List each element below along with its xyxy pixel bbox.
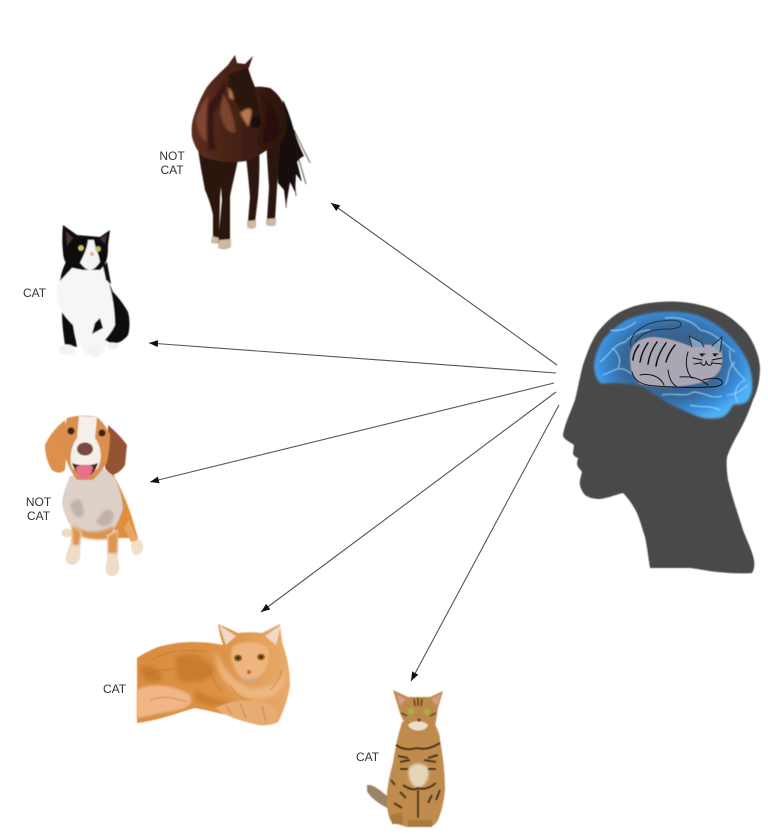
picture: beagle dog bbox=[45, 416, 143, 576]
cat ears bbox=[689, 336, 722, 352]
picture: horse bbox=[192, 55, 310, 249]
orange cat eyes and nose bbox=[234, 655, 242, 661]
tabby inner ears bbox=[396, 694, 441, 706]
label: not cat (dog): CAT bbox=[27, 509, 51, 523]
cat tail bbox=[631, 320, 681, 347]
tabby muzzle bbox=[408, 721, 428, 731]
cat black head bbox=[62, 225, 110, 270]
horse head bbox=[228, 68, 261, 128]
label: not cat (dog): NOT bbox=[26, 495, 51, 509]
horse tail hairs bbox=[286, 130, 310, 208]
tabby feet bbox=[390, 812, 432, 827]
cat eyes and nose bbox=[78, 245, 84, 251]
horse front legs bbox=[198, 148, 240, 243]
orange cat face bbox=[231, 642, 269, 682]
arrow: to black and white cat bbox=[149, 343, 556, 373]
tabby stripes bbox=[391, 743, 440, 818]
dog face bbox=[63, 416, 110, 480]
arrow: to tabby cat bbox=[411, 405, 559, 681]
dog left ear bbox=[45, 420, 67, 473]
tabby forehead stripes bbox=[401, 698, 436, 716]
label: cat (tabby): CAT bbox=[356, 750, 380, 764]
orange cat inner ears bbox=[219, 625, 281, 645]
cat black front leg bbox=[62, 312, 77, 347]
dog belly orange bbox=[72, 524, 114, 540]
arrow: to horse bbox=[331, 203, 557, 365]
horse forehead and muzzle markings bbox=[228, 87, 252, 127]
picture: orange long-haired cat bbox=[137, 624, 290, 725]
label: cat (black and white): CAT bbox=[23, 286, 47, 300]
orange cat paws bbox=[215, 700, 278, 725]
illustration: head with brain and cat bbox=[563, 302, 760, 573]
horse hooves bbox=[211, 218, 276, 249]
head silhouette bbox=[563, 302, 760, 573]
orange cat tail bbox=[137, 685, 191, 718]
cat black shoulders bbox=[60, 262, 111, 284]
picture: tabby cat bbox=[367, 690, 445, 827]
cat black chest mark bbox=[92, 318, 103, 334]
dog white blaze and muzzle bbox=[71, 416, 101, 473]
label: not cat (horse): CAT bbox=[160, 163, 184, 177]
dog legs bbox=[66, 522, 119, 576]
orange cat fur shading bbox=[140, 654, 230, 706]
brain bbox=[594, 312, 752, 419]
dog chest shading bbox=[70, 499, 114, 526]
arrow: to orange cat bbox=[261, 392, 556, 612]
arrow: to dog bbox=[150, 383, 554, 482]
orange cat fur strands bbox=[145, 650, 282, 702]
dog tongue bbox=[76, 465, 93, 479]
orange cat fur light areas bbox=[215, 650, 286, 699]
horse muzzle shadow bbox=[251, 116, 261, 128]
cat face bbox=[693, 354, 722, 365]
horse back legs bbox=[245, 138, 281, 222]
label: not cat (horse): NOT bbox=[159, 149, 185, 163]
cat outline and stripes bbox=[632, 372, 722, 387]
tabby body bbox=[387, 722, 445, 827]
cartoon cat in brain bbox=[630, 320, 723, 387]
dog eyes bbox=[67, 427, 75, 435]
tabby tail bbox=[367, 785, 392, 810]
label: cat (orange): CAT bbox=[103, 682, 127, 696]
dog body bbox=[62, 468, 123, 538]
dog leg colouring bbox=[72, 525, 118, 553]
horse shadow folds bbox=[207, 80, 280, 150]
cat paws bbox=[59, 344, 75, 356]
brain folds bbox=[600, 318, 748, 410]
dog rear paws bbox=[131, 539, 143, 555]
tabby chest bbox=[408, 764, 429, 788]
horse coat highlights bbox=[196, 92, 236, 142]
cat white muzzle bbox=[80, 240, 100, 270]
dog nose bbox=[77, 442, 93, 456]
tabby eyes and nose bbox=[408, 708, 414, 714]
tabby head bbox=[393, 690, 443, 735]
dog mouth bbox=[72, 463, 98, 477]
picture: black and white cat bbox=[57, 225, 130, 357]
cat black haunch bbox=[105, 280, 130, 343]
horse body bbox=[192, 55, 287, 162]
dog right ear bbox=[105, 425, 127, 475]
horse tail bbox=[278, 100, 304, 206]
orange cat muzzle bbox=[240, 677, 260, 682]
orange cat body bbox=[137, 624, 290, 725]
cat white body bbox=[57, 262, 117, 355]
cat inner ears bbox=[66, 231, 107, 246]
dog back bbox=[106, 472, 138, 538]
